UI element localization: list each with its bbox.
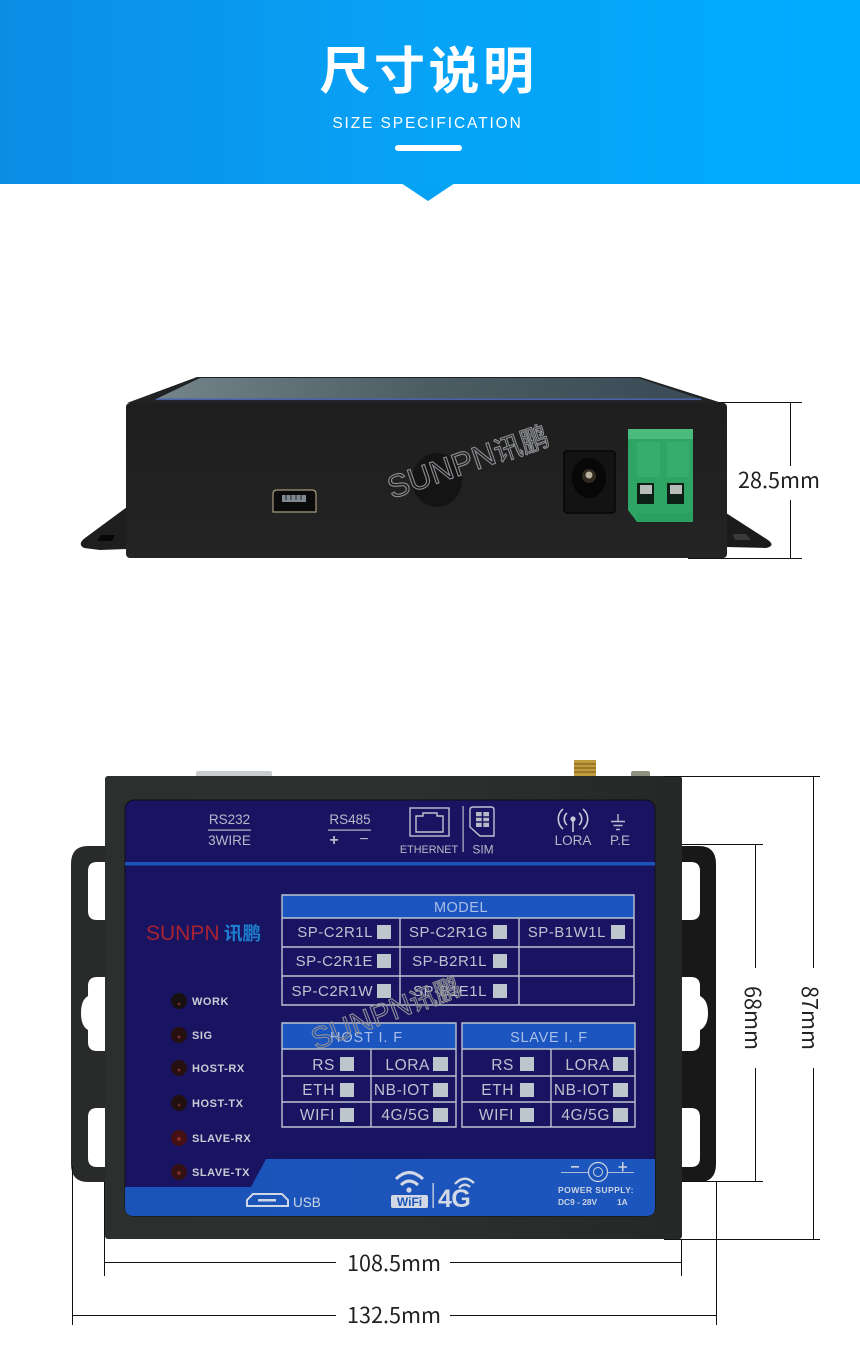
SLAVE I.F table: SLAVE I. F (510, 1030, 588, 1046)
dimension 132.5mm (72, 1166, 716, 1330)
SLAVE I.F table: 4G/5G (561, 1107, 610, 1124)
dimension 87mm: 87mm (795, 986, 826, 1050)
SUNPN logo (146, 922, 261, 945)
HOST I.F table: RS (312, 1057, 335, 1074)
HOST I.F table (282, 1023, 456, 1127)
blue bottom band (125, 1159, 655, 1216)
height dimension 28.5mm (688, 402, 820, 558)
SIM icon (470, 807, 494, 856)
header banner (0, 0, 860, 201)
status LEDs: SIG (192, 1030, 213, 1042)
MODEL table: SP-C2R1E (296, 953, 373, 970)
status LEDs (171, 993, 251, 1180)
SLAVE I.F table: ETH (481, 1082, 514, 1099)
green terminal block (628, 429, 693, 522)
body (126, 403, 727, 558)
RS485 label (328, 812, 371, 849)
HOST I.F table: LORA (385, 1057, 430, 1074)
USB icon and label (247, 1194, 321, 1210)
dimension 108.5mm: 108.5mm (347, 1247, 441, 1278)
RS485 label: RS485 (329, 812, 371, 827)
WiFi and 4G logo: 4G (438, 1185, 470, 1213)
connectors on top edge (196, 760, 650, 777)
blue divider strip (125, 862, 655, 866)
MODEL table (282, 895, 634, 1005)
SIM icon: SIM (472, 842, 494, 856)
left mounting flange (81, 507, 127, 550)
USB icon and label: USB (293, 1195, 321, 1210)
left mounting ear (71, 846, 106, 1182)
port labels row (208, 806, 630, 856)
metal frame (105, 776, 682, 1239)
HOST I.F table: HOST I. F (330, 1030, 403, 1046)
MODEL table: MODEL (434, 900, 488, 916)
HOST I.F table: 4G/5G (381, 1107, 430, 1124)
RS232 label (208, 812, 251, 848)
LORA antenna icon (555, 809, 591, 848)
power supply label: 1A (617, 1197, 628, 1207)
SLAVE I.F table (462, 1023, 635, 1127)
status LEDs: WORK (192, 996, 229, 1008)
dimension 87mm (664, 776, 826, 1240)
status LEDs: SLAVE-TX (192, 1167, 250, 1179)
watermark: SUNPN讯鹏 (307, 969, 465, 1057)
dimension 108.5mm (104, 1182, 682, 1278)
SLAVE I.F table: WIFI (479, 1107, 514, 1124)
height dimension 28.5mm: 28.5mm (738, 464, 820, 495)
protective earth icon (610, 814, 630, 848)
SUNPN logo: SUNPN (146, 922, 220, 945)
navy faceplate (125, 800, 655, 1216)
status LEDs: HOST-RX (192, 1063, 245, 1075)
ethernet icon: ETHERNET (400, 844, 458, 856)
divider between ethernet and SIM (462, 806, 464, 852)
power supply label: DC9 - 28V (558, 1197, 598, 1207)
RS232 label: RS232 (209, 812, 250, 827)
title underline (395, 145, 462, 151)
SUNPN logo: 讯鹏 (224, 923, 261, 944)
banner pointer (401, 183, 455, 201)
top face (127, 377, 722, 403)
SLAVE I.F table: NB-IOT (554, 1082, 610, 1099)
MODEL table: SP-C2R1W (291, 983, 373, 1000)
SLAVE I.F table: RS (491, 1057, 514, 1074)
ethernet icon (400, 808, 458, 856)
protective earth icon: P.E (610, 833, 630, 848)
title: 尺寸说明 (319, 43, 538, 100)
subtitle: SIZE SPECIFICATION (332, 115, 523, 132)
MODEL table: SP-B2R1L (412, 953, 487, 970)
round recess (412, 453, 462, 507)
power supply label: POWER SUPPLY: (558, 1185, 634, 1195)
WiFi and 4G logo (391, 1172, 474, 1213)
MODEL table: SP-C2R1L (297, 924, 373, 941)
dimension 68mm: 68mm (738, 986, 769, 1050)
status LEDs: SLAVE-RX (192, 1133, 251, 1145)
top view device photo (71, 760, 716, 1239)
MODEL table: SP-B1W1L (528, 924, 606, 941)
HOST I.F table: WIFI (300, 1107, 335, 1124)
WiFi and 4G logo: WiFi (397, 1195, 422, 1209)
right mounting flange (726, 513, 772, 548)
RS232 label: 3WIRE (208, 833, 251, 848)
MODEL table: SP-C2R1G (409, 924, 488, 941)
status LEDs: HOST-TX (192, 1098, 244, 1110)
right mounting ear (681, 846, 716, 1182)
HOST I.F table: ETH (302, 1082, 335, 1099)
dimension 132.5mm: 132.5mm (347, 1299, 441, 1330)
dimension 68mm (682, 844, 769, 1182)
RS485 label: − (359, 831, 369, 848)
SLAVE I.F table: LORA (565, 1057, 610, 1074)
power supply label (558, 1162, 634, 1207)
LORA antenna icon: LORA (555, 833, 591, 848)
side view device photo (81, 377, 772, 558)
watermark: SUNPN讯鹏 (383, 417, 553, 506)
HOST I.F table: NB-IOT (374, 1082, 430, 1099)
DC jack (564, 451, 615, 513)
mini USB port (273, 490, 316, 512)
RS485 label: + (329, 832, 339, 849)
MODEL table: SP-B1E1L (413, 983, 487, 1000)
